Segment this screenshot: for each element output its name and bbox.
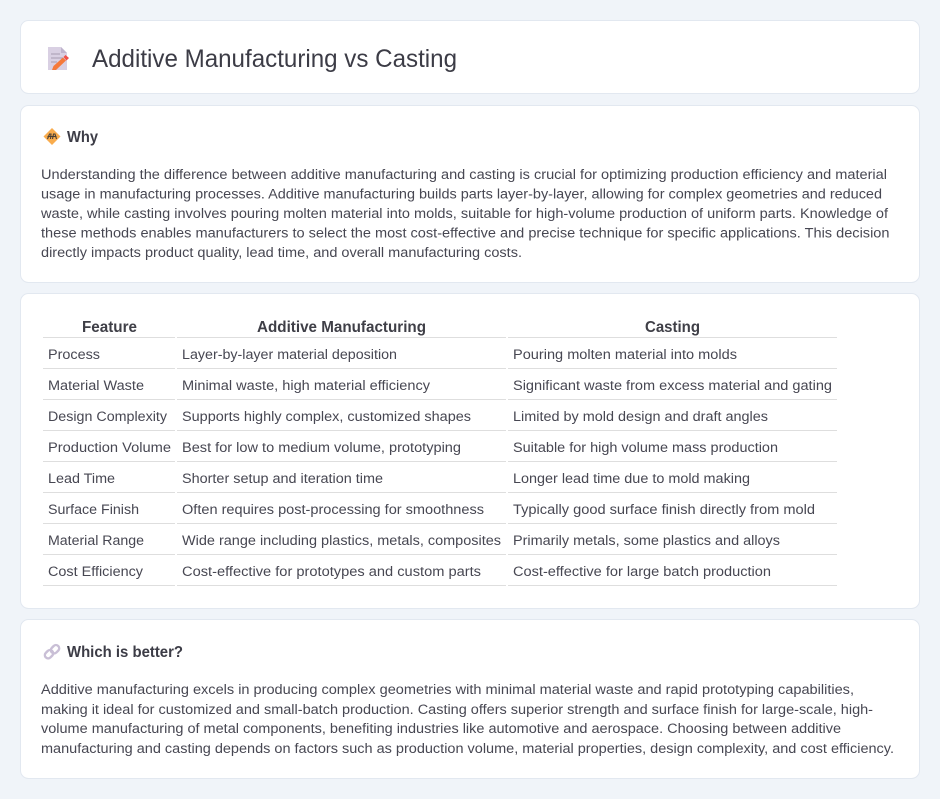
why paragraph: usage in manufacturing processes. Additive manufacturing builds parts layer-by-layer, allowing for complex geometries and reduced xyxy=(41,186,882,202)
row: production volume: Best for low to medium volume, prototyping xyxy=(182,440,461,456)
table header: Additive Manufacturing xyxy=(257,319,426,336)
row: cost efficiency: Cost Efficiency xyxy=(48,564,144,580)
panel: comparison table xyxy=(20,294,920,608)
icon: document with pencil xyxy=(48,47,69,70)
row: surface finish: Typically good surface finish directly from mold xyxy=(513,502,815,518)
row: material waste: Material Waste xyxy=(48,378,144,394)
row: design complexity: Limited by mold design and draft angles xyxy=(513,409,768,425)
icon: chain link xyxy=(44,644,61,660)
panel: why xyxy=(20,106,920,282)
row: material waste: Significant waste from excess material and gating xyxy=(513,378,832,394)
row: process: Process xyxy=(48,347,100,363)
panel: which is better xyxy=(20,620,920,778)
why paragraph: these methods enables manufacturers to select the most cost-effective and precise technique for specific applications. This decision xyxy=(41,226,890,242)
table header: Feature xyxy=(82,319,137,336)
row: cost efficiency: Cost-effective for large batch production xyxy=(513,564,771,580)
row: design complexity xyxy=(43,409,837,430)
row: lead time: Shorter setup and iteration time xyxy=(182,471,383,487)
row: lead time: Lead Time xyxy=(48,471,115,487)
which is better paragraph xyxy=(41,682,894,757)
which is better paragraph: Additive manufacturing excels in producing complex geometries with minimal material waste and rapid prototyping capabilities, xyxy=(41,682,854,698)
table header xyxy=(43,319,837,338)
which is better paragraph: making it ideal for customized and small-batch production. Casting offers superior strength and surface finish for large-scale, high- xyxy=(41,702,873,718)
panel: title xyxy=(20,20,920,94)
row: design complexity: Supports highly complex, customized shapes xyxy=(182,409,471,425)
row: material waste: Minimal waste, high material efficiency xyxy=(182,378,431,394)
which is better paragraph: manufacturing and casting depends on factors such as production volume, material properties, design complexity, and cost efficiency. xyxy=(41,741,894,757)
why paragraph xyxy=(40,167,889,261)
row: lead time xyxy=(43,471,837,492)
row: process xyxy=(43,347,837,368)
why paragraph: directly impacts product quality, lead time, and overall manufacturing costs. xyxy=(41,245,522,261)
row: production volume: Production Volume xyxy=(48,440,171,456)
row: material range: Wide range including plastics, metals, composites xyxy=(182,533,501,549)
why paragraph: Understanding the difference between additive manufacturing and casting is crucial for optimizing production efficiency and material xyxy=(41,167,887,183)
which is better paragraph: volume manufacturing of metal components, benefiting industries like automotive and aerospace. Choosing between additive xyxy=(41,721,841,737)
row: material range xyxy=(43,533,837,554)
row: material waste xyxy=(43,378,837,400)
heading: which is better: Which is better? xyxy=(67,644,183,661)
row: cost efficiency: Cost-effective for prototypes and custom parts xyxy=(182,564,481,580)
title text: Additive Manufacturing vs Casting xyxy=(92,45,457,73)
row: cost efficiency xyxy=(43,564,837,586)
row: production volume xyxy=(43,440,837,462)
row: lead time: Longer lead time due to mold making xyxy=(513,471,750,487)
row: process: Pouring molten material into molds xyxy=(513,347,737,363)
table header: Casting xyxy=(645,319,700,336)
icon: warning diamond xyxy=(44,128,60,145)
row: surface finish: Often requires post-processing for smoothness xyxy=(182,502,484,518)
row: surface finish: Surface Finish xyxy=(48,502,139,518)
row: surface finish xyxy=(43,502,837,524)
why paragraph: waste, while casting involves pouring molten material into molds, suitable for high-volume production of uniform parts. Knowledge of xyxy=(40,206,888,222)
row: design complexity: Design Complexity xyxy=(48,409,168,425)
row: process: Layer-by-layer material deposition xyxy=(182,347,397,363)
row: material range: Material Range xyxy=(48,533,144,549)
heading: why: Why xyxy=(67,129,98,146)
row: material range: Primarily metals, some plastics and alloys xyxy=(513,533,780,549)
row: production volume: Suitable for high volume mass production xyxy=(513,440,778,456)
